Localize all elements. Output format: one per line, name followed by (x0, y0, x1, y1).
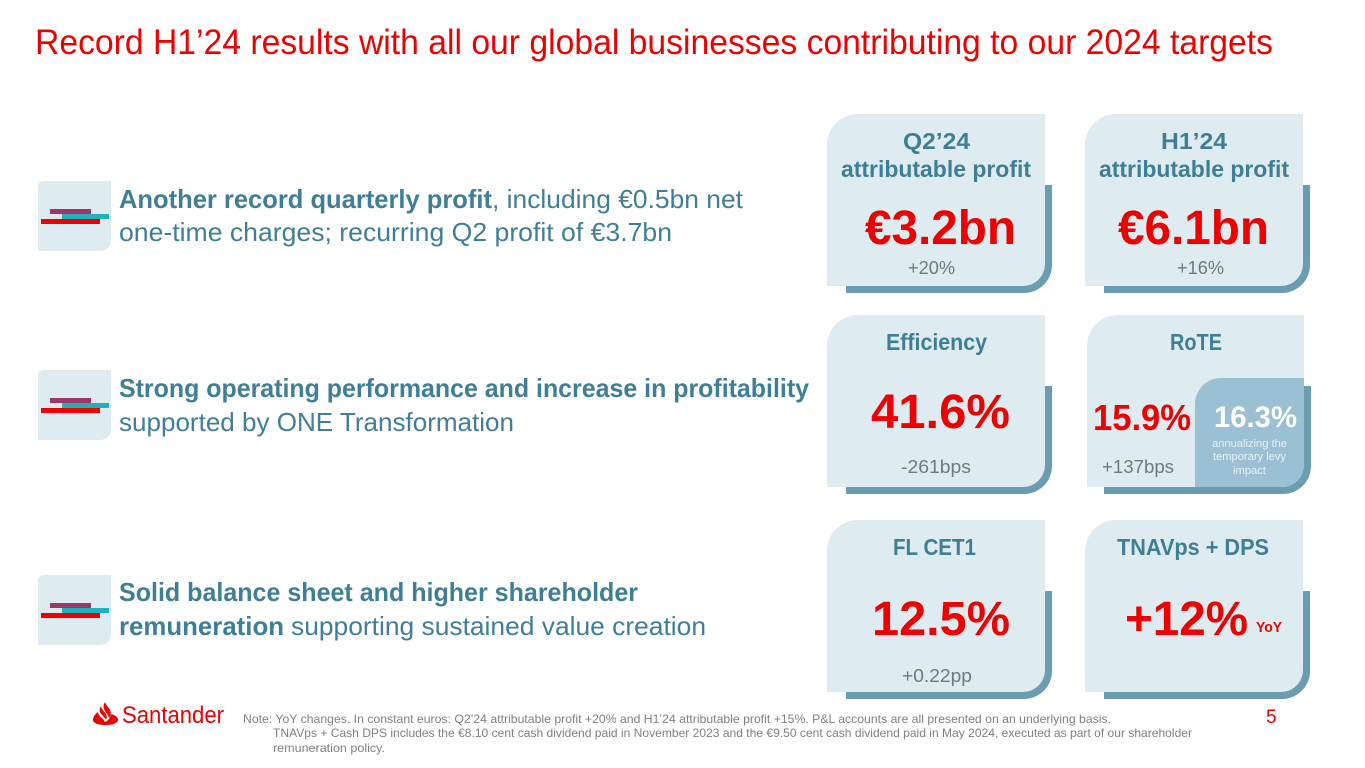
footnote: remuneration policy. (273, 741, 385, 755)
callout: annualized RoTE: temporary levy (1213, 451, 1286, 463)
value: €3.2bn (865, 202, 1016, 255)
icon: bars 1 (38, 181, 111, 251)
panel: FL CET1 (827, 520, 1052, 699)
heading: Q2’24 (903, 128, 970, 154)
heading: attributable profit (841, 156, 1031, 182)
text: record quarterly profit: , including €0.5bn net (492, 184, 744, 214)
panel: H1 profit (1085, 114, 1310, 293)
text: operating performance: Strong operating performance and increase in profitability (119, 373, 810, 403)
value: +12% (1125, 593, 1248, 646)
title: Record H1’24 results with all our global businesses contributing to our 2024 targets (35, 23, 1273, 62)
panel: key message 2 (38, 370, 810, 440)
value: 12.5% (872, 593, 1010, 646)
footnote: TNAVps + Cash DPS includes the €8.10 cent cash dividend paid in November 2023 and the €9.50 cent cash dividend paid in May 2024, executed as part of our shareholder (273, 726, 1192, 740)
callout: annualized RoTE: impact (1233, 465, 1266, 477)
text: balance sheet: Solid balance sheet and higher shareholder (119, 577, 638, 607)
text: operating performance: supported by ONE Transformation (119, 407, 514, 437)
heading: attributable profit (1099, 156, 1289, 182)
panel: TNAVps + DPS (1085, 520, 1310, 699)
callout: annualized RoTE: 16.3% (1214, 401, 1297, 434)
heading: RoTE (1170, 329, 1222, 355)
value: 15.9% (1093, 397, 1191, 438)
change: +20% (908, 258, 955, 278)
change: -261bps (901, 457, 971, 477)
footnote: Note: YoY changes. In constant euros: Q2’24 attributable profit +20% and H1’24 attributable profit +15%. P&L accounts are all presented on an underlying basis. (243, 712, 1111, 726)
panel: key message 3 (38, 575, 706, 645)
value: €6.1bn (1118, 202, 1269, 255)
icon: bars 2 (38, 370, 111, 440)
text: balance sheet: remuneration (119, 611, 284, 641)
logo: Santander: Santander (122, 702, 224, 729)
value: 41.6% (871, 386, 1010, 439)
heading: Efficiency (886, 329, 987, 355)
panel: Q2 profit (827, 114, 1052, 293)
panel: RoTE (1087, 315, 1311, 494)
icon: bars 3 (38, 575, 111, 645)
callout: annualized RoTE: annualizing the (1212, 438, 1287, 450)
heading: FL CET1 (893, 534, 976, 560)
change: +16% (1177, 258, 1224, 278)
heading: H1’24 (1161, 128, 1227, 154)
change: +0.22pp (902, 666, 972, 686)
text: balance sheet: supporting sustained value creation (291, 611, 706, 641)
YoY label: YoY (1256, 619, 1282, 636)
panel: Efficiency (827, 315, 1052, 494)
heading: TNAVps + DPS (1117, 534, 1269, 560)
change: +137bps (1102, 457, 1174, 477)
page number: 5 (1266, 707, 1277, 728)
panel: key message 1 (38, 181, 744, 251)
callout: annualized RoTE (1195, 378, 1304, 487)
text: record quarterly profit: one-time charges; recurring Q2 profit of €3.7bn (119, 217, 672, 247)
text: record quarterly profit: Another record quarterly profit (119, 184, 492, 214)
